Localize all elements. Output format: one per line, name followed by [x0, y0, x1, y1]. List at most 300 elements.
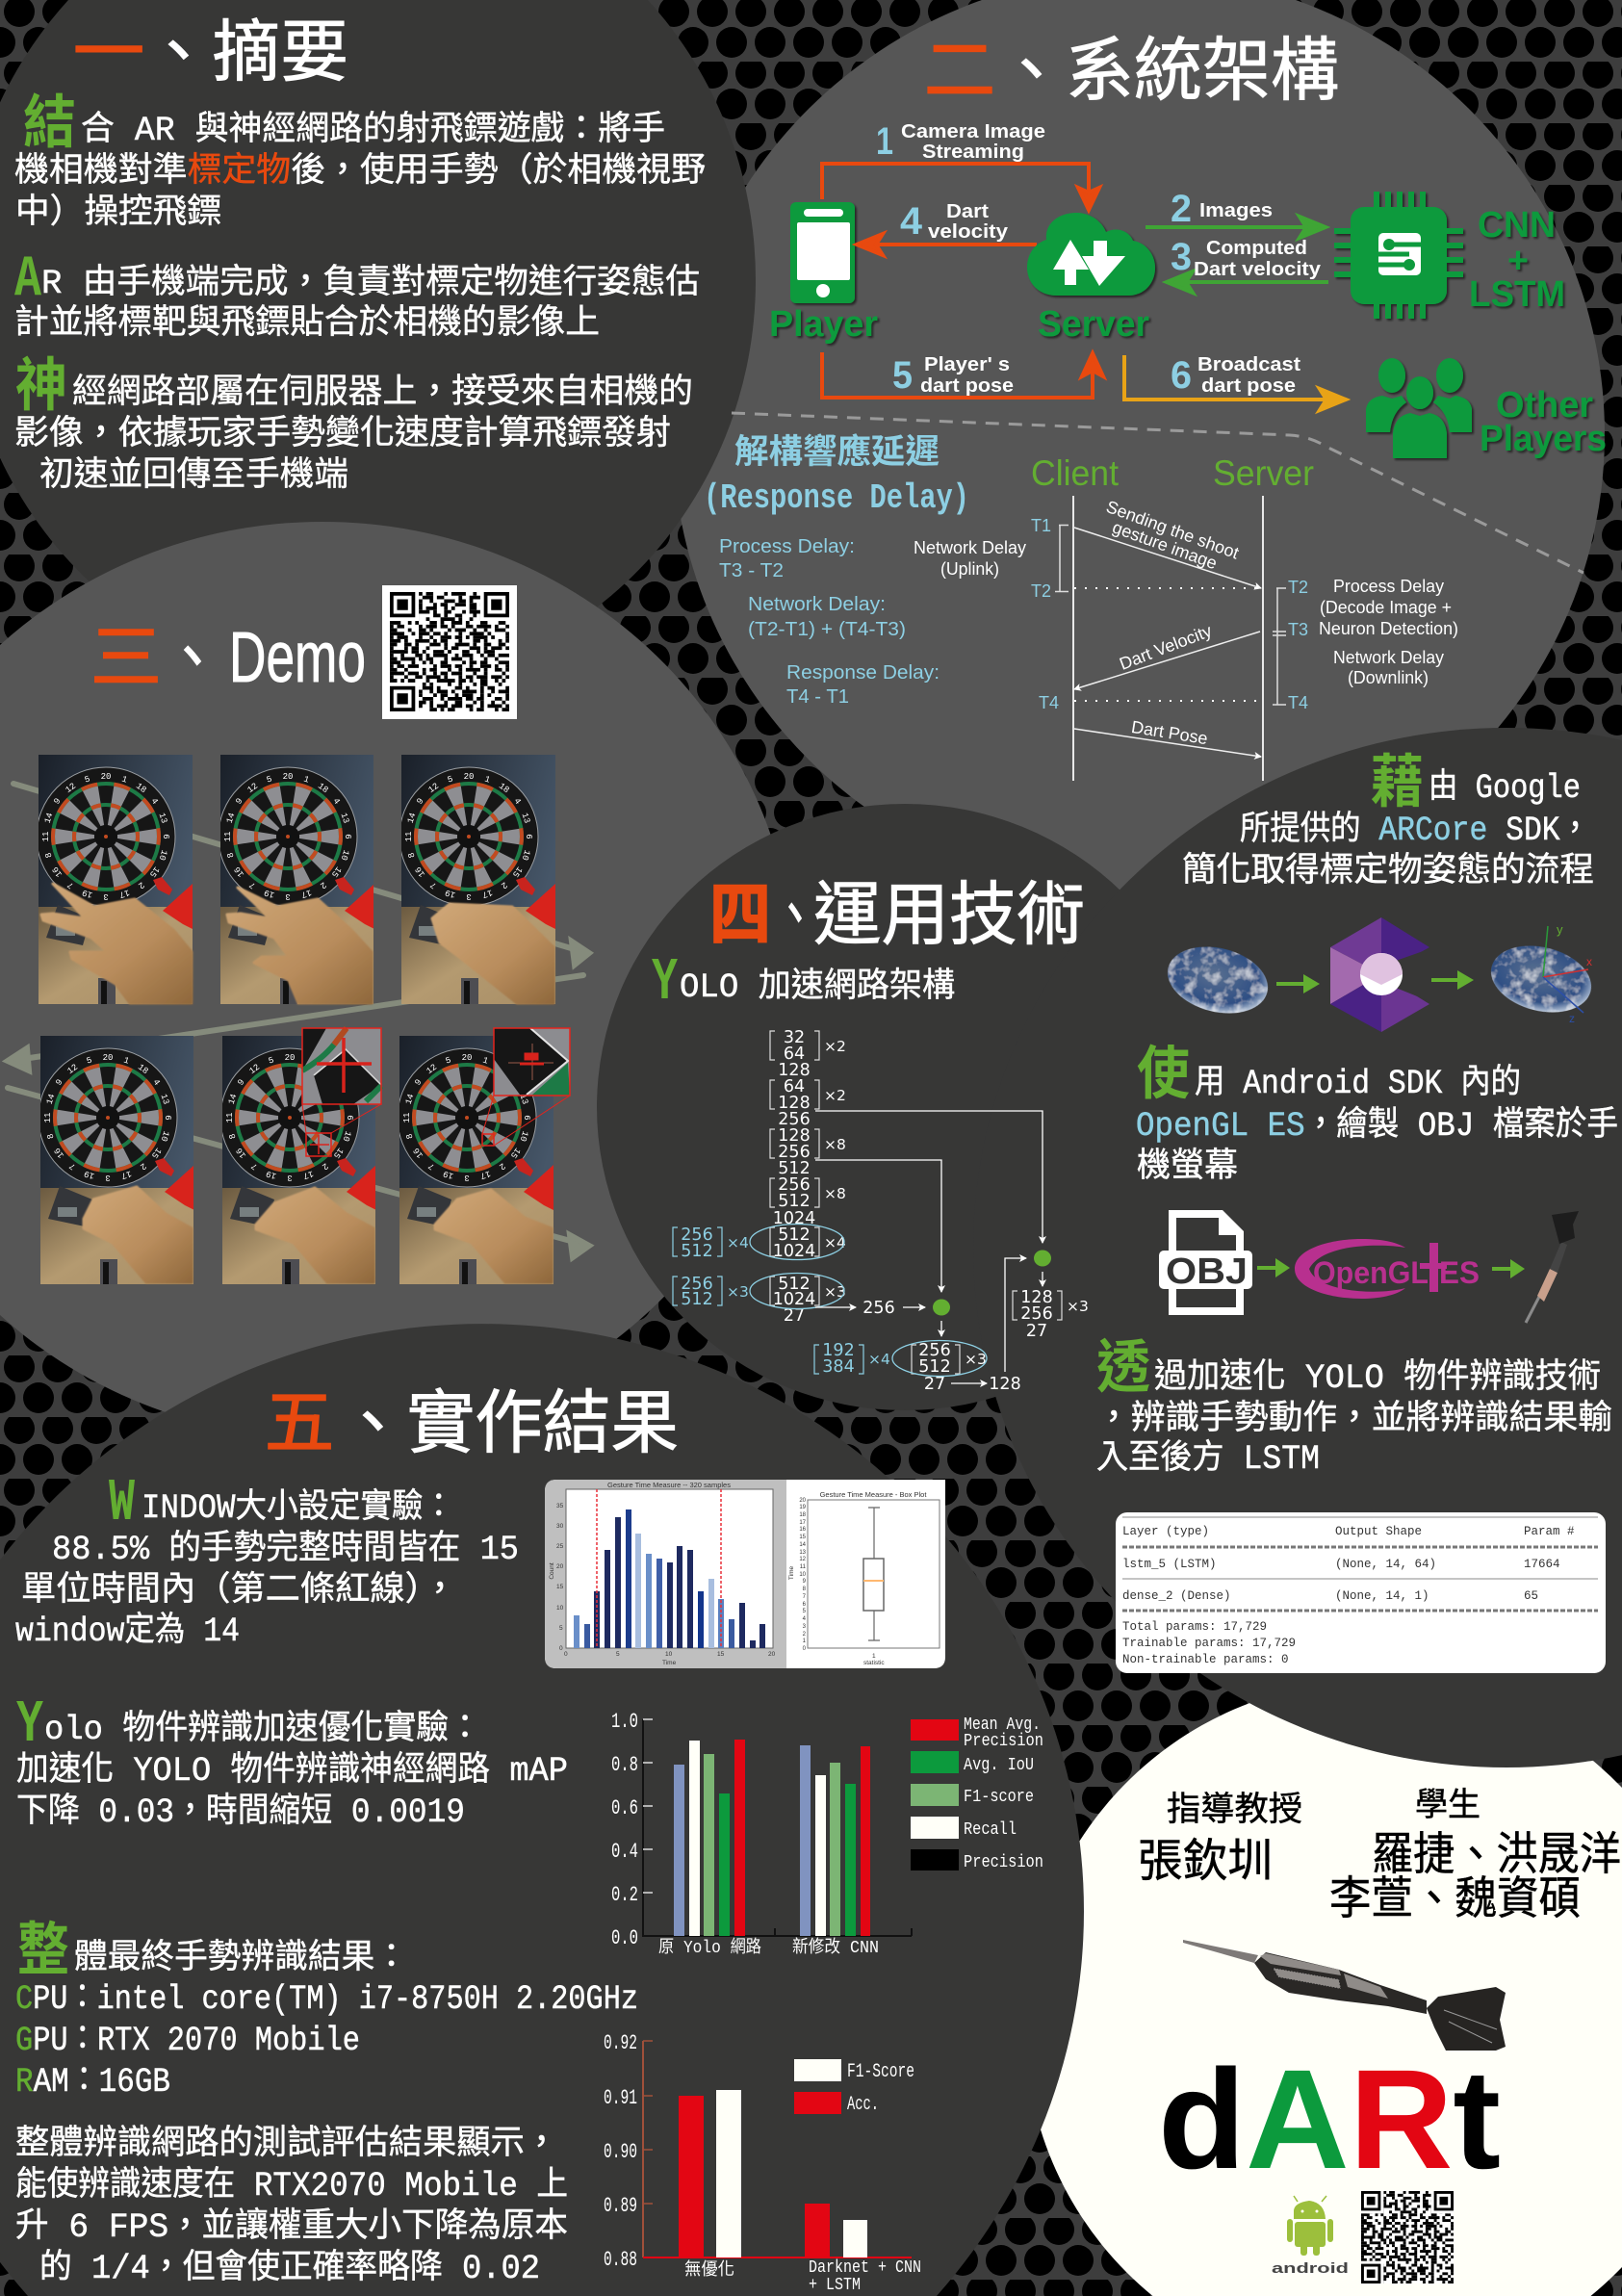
sequence diagram: T2: [1288, 578, 1308, 597]
arrow 6: broadcast dart pose: [1124, 355, 1346, 410]
text block: evaluation: 的 1/4，但會使正確率略降 0.02: [39, 2248, 540, 2288]
label 1: Streaming: [922, 142, 1024, 163]
text block: abstract 1: 中）操控飛鏢: [15, 193, 221, 233]
students: 學生: [1415, 1787, 1480, 1823]
YOLO network diagram: 512: [681, 1290, 713, 1309]
chart: gesture time measure: 30: [556, 1523, 564, 1530]
chart: gesture time measure: 10: [799, 1572, 807, 1578]
heading: YOLO network: [652, 948, 955, 1017]
chart: gesture time measure: 0: [803, 1646, 807, 1652]
chart: gesture time measure: Gesture Time Measure - Box Plot: [820, 1490, 927, 1499]
sequence diagram: [914, 453, 1458, 781]
section: system architecture: [704, 36, 1607, 781]
label: CNN + LSTM: [1469, 205, 1565, 315]
YOLO network diagram: ×4: [727, 1234, 749, 1251]
sequence diagram: Sending the shoot: [1103, 497, 1242, 563]
YOLO network diagram: 256: [681, 1225, 713, 1245]
text block: abstract 3: 神: [15, 355, 67, 424]
chart: gesture time measure: 14: [799, 1542, 807, 1548]
photo 3: [399, 755, 555, 1004]
YOLO network diagram: 256: [1020, 1304, 1053, 1324]
label 5: Player' s: [924, 354, 1010, 375]
YOLO network diagram: 512: [778, 1225, 811, 1245]
label: CNN + LSTM: +: [1507, 241, 1529, 281]
chart: accuracy bar chart: 0.92: [604, 2031, 637, 2055]
heading: abstract: [73, 16, 348, 96]
chart: gesture time measure: 17: [799, 1520, 807, 1526]
label 5: 5: [892, 354, 913, 397]
chart: accuracy bar chart: + LSTM: [809, 2276, 861, 2295]
chart: YOLO bar chart: [611, 1710, 1043, 1958]
label 4: Dart: [946, 201, 989, 222]
sequence diagram: Client: [1031, 453, 1120, 493]
YOLO network diagram: ×8: [824, 1185, 846, 1202]
model summary table: Total params: 17,729: [1122, 1620, 1267, 1634]
text block: evaluation: 整體辨識網路的測試評估結果顯示，: [15, 2124, 558, 2164]
QR code: demo: [382, 585, 517, 719]
chart: gesture time measure: 6: [803, 1602, 807, 1608]
chart: gesture time measure: 11: [800, 1564, 807, 1570]
sequence diagram: T3: [1288, 620, 1308, 639]
label 6: dart pose: [1201, 375, 1296, 397]
label 6: [1171, 354, 1300, 397]
text block: abstract 3: 經網路部屬在伺服器上，接受來自相機的: [72, 373, 693, 413]
YOLO network diagram: ×8: [824, 1136, 846, 1153]
photo 4: [39, 1036, 194, 1285]
label: Other Players: Players: [1480, 419, 1607, 459]
chart: YOLO bar chart: Recall: [964, 1820, 1017, 1840]
YOLO network diagram: [673, 1028, 1089, 1394]
heading: technology: 、: [773, 881, 817, 960]
panel: abstract circle: [0, 0, 756, 689]
text block: window experiment: W: [109, 1469, 136, 1537]
icon: chip: [1334, 192, 1463, 319]
heading: response delay: (Response Delay): [704, 478, 969, 518]
heading: demo: Demo: [229, 617, 366, 697]
chart: gesture time measure: 20: [799, 1498, 807, 1504]
chart: YOLO bar chart: 1.0: [611, 1710, 638, 1734]
heading: demo: 、: [164, 624, 221, 703]
heading: abstract: 一: [73, 20, 144, 96]
YOLO network diagram: 128: [1020, 1288, 1053, 1307]
chart: accuracy bar chart: F1-Score: [847, 2061, 914, 2083]
model summary table: Non-trainable params: 0: [1122, 1653, 1289, 1666]
label 2: 2: [1171, 188, 1192, 230]
label: Other Players: [1480, 385, 1607, 459]
chart: gesture time measure: 15: [556, 1584, 564, 1590]
logo: dART: dARt: [1158, 2041, 1501, 2199]
YOLO network diagram: 64: [784, 1045, 805, 1064]
arrow 4: dart velocity: [857, 234, 1037, 255]
text block: evaluation: 能使辨識速度在 RTX2070 Mobile 上: [15, 2165, 568, 2206]
chart: accuracy bar chart: 0.90: [604, 2140, 637, 2164]
sequence diagram: T1: [1031, 516, 1051, 535]
text block: abstract 2: 計並將標靶與飛鏢貼合於相機的影像上: [14, 303, 600, 344]
YOLO network diagram: 1024: [773, 1242, 815, 1261]
text block: YOLO experiment: olo 物件辨識加速優化實驗：: [44, 1709, 481, 1749]
students: [1329, 1787, 1621, 1923]
label 1: 1: [876, 120, 893, 163]
model summary table: lstm_5 (LSTM): [1122, 1558, 1217, 1571]
chart: gesture time measure: 9: [803, 1579, 807, 1585]
chart: YOLO bar chart: Precision: [964, 1732, 1043, 1751]
chart: YOLO bar chart: Avg. IoU: [964, 1756, 1034, 1775]
heading: technology: 運用技術: [813, 880, 1085, 960]
chart: gesture time measure: Time: [662, 1660, 677, 1666]
arrow: OpenGL to dart: [1492, 1259, 1525, 1278]
chart: YOLO bar chart: Precision: [964, 1853, 1043, 1872]
label 5: dart pose: [920, 375, 1014, 397]
model summary table: 17664: [1524, 1558, 1560, 1571]
text block: ARCore: [1182, 752, 1594, 891]
label 3: Dart velocity: [1194, 259, 1322, 280]
chart: accuracy bar chart: 0.88: [604, 2248, 637, 2272]
heading: abstract: 、摘要: [144, 16, 348, 96]
text block: abstract 2: [14, 247, 700, 344]
section: demo: [8, 585, 589, 1285]
label 4: [900, 200, 1009, 243]
arrow 1: camera image streaming: [822, 164, 1099, 210]
label 6: Broadcast: [1197, 354, 1300, 375]
arrow: ARCore to earth axes: [1431, 970, 1474, 990]
text block: ARCore: 所提供的 ARCore SDK，: [1240, 810, 1590, 850]
heading: response delay: 解構響應延遲: [734, 433, 940, 474]
text block: YOLO recognition: 過加速化 YOLO 物件辨識技術: [1154, 1357, 1601, 1398]
text block: ARCore: 簡化取得標定物姿態的流程: [1182, 851, 1594, 891]
panel: demo circle: [0, 522, 795, 1438]
label 4: velocity: [928, 221, 1009, 243]
YOLO network diagram: 27: [1026, 1322, 1047, 1341]
text block: delay formulas: Process Delay:: [719, 536, 855, 557]
chart: gesture time measure: statistic: [863, 1660, 885, 1666]
chart: gesture time measure: 0: [564, 1651, 568, 1658]
photo 6: [398, 1028, 570, 1285]
sequence diagram: gesture image: [1110, 517, 1220, 573]
model summary table: 65: [1524, 1589, 1538, 1603]
chart: accuracy bar chart: 0.89: [604, 2194, 637, 2218]
chart: gesture time measure: 7: [803, 1594, 807, 1600]
arrow 3: computed dart velocity: [1167, 271, 1328, 293]
icon: OpenGL ES logo: OpenGL: [1313, 1255, 1429, 1290]
chart: gesture time measure: 25: [556, 1543, 564, 1550]
text block: final results: 體最終手勢辨識結果：: [74, 1938, 408, 1978]
icon: phone: [790, 202, 855, 303]
text block: delay formulas: Response Delay:: [786, 662, 940, 684]
chart: gesture time measure: 1: [872, 1653, 876, 1660]
text block: abstract 3: 初速並回傳至手機端: [39, 455, 348, 496]
heading: results: 、實作結果: [339, 1387, 679, 1468]
chart: gesture time measure: Gesture Time Measure -- 320 samples: [607, 1481, 731, 1489]
text block: abstract 1: [14, 92, 706, 233]
text block: abstract 2: R 由手機端完成，負責對標定物進行姿態估: [41, 263, 700, 303]
text block: abstract 2: A: [14, 247, 41, 313]
text block: delay formulas: T3 - T2: [719, 560, 784, 581]
text block: window experiment: window定為 14: [15, 1611, 240, 1651]
sequence diagram: (Downlink): [1348, 668, 1429, 687]
chart: gesture time measure: [545, 1480, 945, 1668]
text block: OpenGL ES: [1136, 1044, 1618, 1187]
icon: ARCore logo: [1330, 917, 1431, 1032]
sequence diagram: Network Delay: [914, 538, 1026, 557]
label 2: [1171, 188, 1273, 230]
chart: gesture time measure: 35: [556, 1503, 564, 1509]
YOLO network diagram: 128: [778, 1126, 811, 1146]
chart: accuracy bar chart: Darknet + CNN: [809, 2258, 921, 2278]
chart: gesture time measure: 15: [799, 1535, 807, 1540]
text block: window experiment: 88.5% 的手勢完整時間皆在 15: [52, 1529, 519, 1569]
chart: accuracy bar chart: 無優化: [684, 2259, 734, 2281]
icon: android: android: [1272, 2260, 1349, 2277]
chart: YOLO bar chart: 0.8: [611, 1753, 638, 1777]
YOLO network diagram: 128: [778, 1094, 811, 1113]
chart: gesture time measure: 3: [803, 1624, 807, 1630]
chart: YOLO bar chart: 0.6: [611, 1796, 638, 1820]
text block: YOLO experiment: [16, 1690, 568, 1832]
YOLO network diagram: 512: [681, 1242, 713, 1261]
label: Player: Player: [769, 304, 878, 345]
panel: results circle: [0, 1324, 1084, 2296]
icon: earth with axes: [1484, 922, 1598, 1025]
text block: YOLO experiment: Y: [16, 1690, 44, 1759]
text block: window experiment: [15, 1469, 519, 1651]
sequence diagram: (Uplink): [940, 559, 999, 579]
text block: abstract 3: 影像，依據玩家手勢變化速度計算飛鏢發射: [14, 414, 671, 454]
YOLO network diagram: 256: [681, 1275, 713, 1294]
model summary table: [1116, 1512, 1606, 1673]
chart: gesture time measure: 13: [799, 1550, 807, 1556]
sequence diagram: Network Delay: [1333, 648, 1444, 667]
chart: YOLO bar chart: 新修改 CNN: [792, 1937, 879, 1958]
model summary table: Output Shape: [1335, 1525, 1422, 1538]
label: Other Players: Other: [1496, 385, 1593, 426]
chart: gesture time measure: 18: [799, 1512, 807, 1518]
arrow: OBJ to OpenGL: [1257, 1258, 1290, 1277]
label 1: Camera Image: [901, 121, 1045, 142]
icon: OBJ file: [1159, 1210, 1252, 1315]
text block: delay formulas: [719, 536, 940, 708]
YOLO network diagram: 512: [778, 1159, 811, 1178]
chart: gesture time measure: 4: [803, 1616, 807, 1622]
model summary table: dense_2 (Dense): [1122, 1589, 1231, 1603]
YOLO network diagram: 1024: [773, 1290, 815, 1309]
icon: OpenGL ES logo: [1295, 1239, 1480, 1299]
text block: abstract 1: 結: [23, 92, 76, 161]
model summary table: (None, 14, 64): [1335, 1558, 1436, 1571]
chart: gesture time measure: 8: [803, 1587, 807, 1592]
arrow 2: images: [1146, 217, 1326, 238]
text block: YOLO experiment: 下降 0.03，時間縮短 0.0019: [16, 1792, 465, 1832]
chart: YOLO bar chart: 0.0: [611, 1926, 638, 1950]
text block: YOLO experiment: 加速化 YOLO 物件辨識神經網路 mAP: [16, 1750, 568, 1791]
YOLO network diagram: ×3: [1067, 1298, 1089, 1315]
chart: gesture time measure: 15: [717, 1651, 725, 1658]
text block: ARCore: 藉: [1371, 752, 1424, 820]
sequence diagram: T2: [1031, 581, 1051, 601]
chart: gesture time measure: Count: [549, 1562, 555, 1580]
QR code: app download: [1361, 2191, 1454, 2283]
label 3: 3: [1171, 236, 1192, 278]
icon: OpenGL ES logo: ES: [1439, 1255, 1480, 1290]
heading: YOLO network: Y: [652, 948, 679, 1017]
sequence diagram: T4: [1288, 693, 1308, 712]
icon: rendered dart: [1526, 1211, 1579, 1323]
text block: final results: GPU：RTX 2070 Mobile: [15, 2022, 360, 2060]
text block: OpenGL ES: 機螢幕: [1137, 1147, 1238, 1187]
chart: gesture time measure: 12: [799, 1557, 807, 1562]
YOLO network diagram: ×3: [824, 1283, 846, 1301]
label 4: 4: [900, 200, 923, 243]
photo 5: [220, 1028, 381, 1285]
heading: technology: 四: [709, 881, 771, 960]
sequence diagram: (Decode Image +: [1320, 598, 1452, 617]
YOLO network diagram: 128: [989, 1375, 1021, 1394]
model summary table: Param #: [1524, 1525, 1575, 1538]
section: results: [15, 1387, 1043, 2295]
YOLO network diagram: 64: [784, 1077, 805, 1096]
icon: dart illustration: [1183, 1940, 1506, 2051]
text block: YOLO recognition: [1096, 1337, 1612, 1479]
text block: final results: [15, 1920, 638, 2102]
text block: YOLO recognition: ，辨識手勢動作，並將辨識結果輸: [1096, 1399, 1612, 1439]
icon: android: [1272, 2196, 1349, 2277]
sequence diagram: T4: [1039, 693, 1059, 712]
text block: evaluation: 升 6 FPS，並讓權重大小下降為原本: [15, 2206, 568, 2247]
YOLO network diagram: 256: [918, 1341, 951, 1360]
chart: gesture time measure: 5: [803, 1609, 807, 1614]
students: 李萱、魏資碩: [1329, 1872, 1581, 1923]
arrow 5: player's dart pose: [822, 352, 1103, 398]
label 3: [1171, 236, 1322, 280]
label: CNN + LSTM: CNN: [1478, 205, 1556, 245]
YOLO network diagram: 384: [822, 1357, 855, 1377]
photo 2: [219, 755, 374, 1004]
YOLO network diagram: ×3: [965, 1351, 987, 1368]
YOLO network diagram: 256: [778, 1110, 811, 1129]
YOLO network diagram: 1024: [773, 1209, 815, 1228]
icon: earth marker: [1161, 937, 1274, 1023]
label 3: Computed: [1206, 238, 1307, 259]
chart: YOLO bar chart: 0.4: [611, 1840, 638, 1864]
text block: final results: CPU：intel core(TM) i7-8750H 2.20GHz: [15, 1980, 638, 2019]
icon: cloud server: [1027, 213, 1155, 296]
chart: gesture time measure: 20: [768, 1651, 776, 1658]
heading: system architecture: 、系統架構: [997, 36, 1339, 116]
chart: gesture time measure: 19: [799, 1505, 807, 1510]
icon: earth with axes: y: [1557, 922, 1563, 937]
chart: accuracy bar chart: [604, 2031, 921, 2295]
label 6: 6: [1171, 354, 1192, 397]
arrow: earth to ARCore: [1276, 974, 1320, 993]
section: abstract: [14, 16, 706, 496]
text block: OpenGL ES: 用 Android SDK 內的: [1195, 1063, 1521, 1103]
text block: YOLO recognition: 入至後方 LSTM: [1096, 1438, 1320, 1479]
text block: YOLO recognition: 透: [1096, 1337, 1150, 1406]
YOLO network diagram: 192: [822, 1341, 855, 1360]
panel: system architecture circle: [673, 0, 1605, 895]
text block: evaluation: [15, 2124, 568, 2288]
YOLO network diagram: 512: [778, 1275, 811, 1294]
section: technology: [652, 752, 1618, 1673]
photo 1: [37, 755, 193, 1004]
text block: delay formulas: T4 - T1: [786, 686, 849, 708]
panel: credits circle: [1025, 1681, 1622, 2296]
YOLO network diagram: ×4: [868, 1351, 890, 1368]
YOLO network diagram: 512: [918, 1357, 951, 1377]
flow arrows: [8, 784, 589, 1257]
model summary table: (None, 14, 1): [1335, 1589, 1429, 1603]
sequence diagram: Process Delay: [1333, 577, 1444, 596]
advisor: 指導教授: [1167, 1791, 1302, 1828]
text block: final results: RAM：16GB: [15, 2063, 170, 2102]
chart: gesture time measure: 5: [616, 1651, 620, 1658]
advisor: 張欽圳: [1138, 1835, 1273, 1886]
YOLO network diagram: 256: [778, 1143, 811, 1162]
text block: OpenGL ES: 使: [1137, 1044, 1190, 1112]
chart: gesture time measure: 10: [556, 1605, 564, 1612]
icon: other players: [1366, 358, 1472, 458]
panel: technology circle: [597, 804, 1213, 1410]
sequence diagram: Neuron Detection): [1319, 619, 1458, 638]
chart: YOLO bar chart: 原 Yolo 網路: [658, 1937, 761, 1958]
heading: demo: 三: [90, 624, 162, 703]
label: Server: Server: [1038, 304, 1149, 345]
text block: final results: 整: [17, 1920, 69, 1988]
YOLO network diagram: 256: [862, 1299, 895, 1318]
chart: YOLO bar chart: Mean Avg.: [964, 1716, 1041, 1735]
text block: abstract 1: 合 AR 與神經網路的射飛鏢遊戲：將手: [81, 110, 665, 150]
chart: YOLO bar chart: F1-score: [964, 1788, 1034, 1807]
YOLO network diagram: 27: [784, 1306, 805, 1326]
label 2: Images: [1199, 200, 1273, 221]
label 1: [876, 120, 1045, 163]
advisor: [1138, 1791, 1302, 1886]
sequence diagram: Server: [1213, 453, 1314, 493]
heading: results: 五: [265, 1389, 334, 1468]
YOLO network diagram: ×3: [727, 1283, 749, 1301]
icon: earth with axes: x: [1586, 955, 1592, 968]
YOLO network diagram: 512: [778, 1192, 811, 1211]
sequence diagram: Dart Velocity: [1117, 621, 1215, 674]
chart: gesture time measure: 5: [559, 1625, 563, 1632]
YOLO network diagram: ×4: [824, 1234, 846, 1251]
text block: delay formulas: (T2-T1) + (T4-T3): [748, 619, 906, 640]
YOLO network diagram: 128: [778, 1061, 811, 1080]
chart: gesture time measure: 20: [556, 1563, 564, 1570]
chart: accuracy bar chart: Acc.: [847, 2094, 879, 2116]
sequence diagram: Dart Pose: [1130, 717, 1209, 748]
heading: system architecture: 二: [924, 37, 995, 116]
label: CNN + LSTM: LSTM: [1469, 274, 1565, 315]
YOLO network diagram: 256: [778, 1175, 811, 1195]
model summary table: Trainable params: 17,729: [1122, 1637, 1296, 1650]
chart: gesture time measure: 1: [803, 1638, 807, 1644]
heading: response delay: [704, 433, 969, 518]
heading: demo: [90, 617, 366, 703]
label 5: [892, 354, 1014, 397]
chart: accuracy bar chart: 0.91: [604, 2086, 637, 2110]
chart: gesture time measure: 10: [665, 1651, 673, 1658]
YOLO network diagram: 27: [924, 1375, 945, 1394]
YOLO network diagram: ×2: [824, 1087, 846, 1104]
text block: abstract 1: 機相機對準標定物後，使用手勢（於相機視野: [14, 151, 706, 192]
icon: earth with axes: z: [1569, 1012, 1575, 1025]
model summary table: Layer (type): [1122, 1525, 1209, 1538]
chart: gesture time measure: 0: [559, 1645, 563, 1652]
chart: gesture time measure: 16: [799, 1527, 807, 1533]
text block: window experiment: 單位時間內（第二條紅線），: [21, 1570, 457, 1611]
chart: gesture time measure: Time: [788, 1566, 795, 1580]
heading: YOLO network: OLO 加速網路架構: [680, 967, 955, 1007]
